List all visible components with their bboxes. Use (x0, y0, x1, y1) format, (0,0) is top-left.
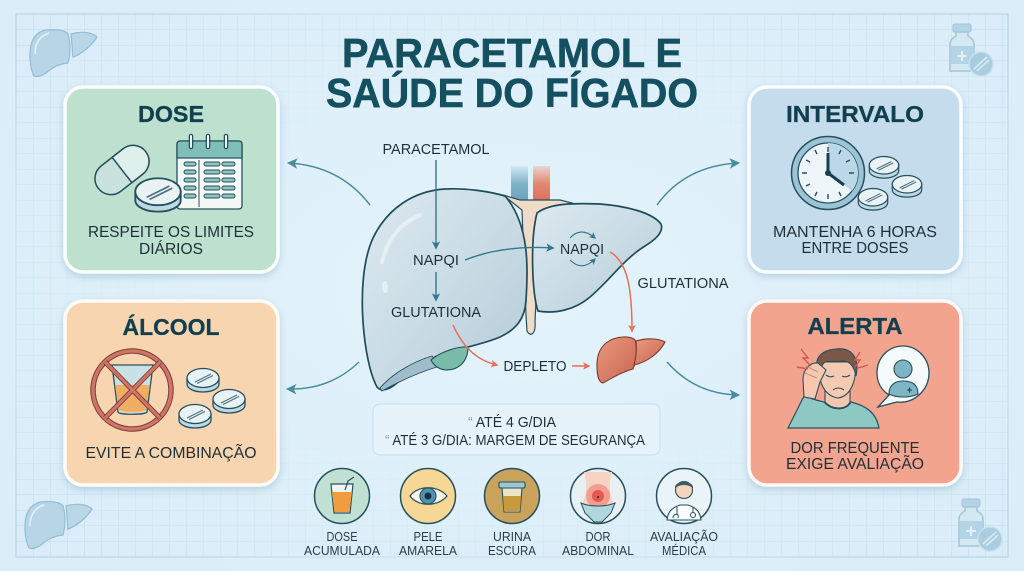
icon item: urina escura (484, 468, 540, 558)
text: dose (88, 224, 254, 258)
heading: interval: INTERVALO (786, 101, 924, 127)
text: alert (786, 440, 924, 473)
icon item: dose acumulada: DOSE (326, 529, 358, 544)
arrow: napqi to glutationa (435, 272, 437, 300)
panel: alcohol (65, 301, 278, 485)
text: interval: ENTRE DOSES (802, 240, 908, 257)
icon item: dor abdominal: DOR (586, 529, 610, 544)
icon item: pele amarela: AMARELA (399, 543, 457, 558)
icon: doctor speech bubble (877, 346, 929, 407)
arrow: to alcohol (288, 362, 359, 389)
arrow: to interval (657, 163, 738, 205)
title (326, 30, 698, 116)
icon: capsule (89, 139, 155, 201)
icon: corner medicine bottom right (959, 499, 1002, 551)
icon item: urina escura: URINA (493, 529, 531, 544)
vessels (511, 166, 550, 202)
arrow: to alert (667, 362, 738, 395)
callout: dose limits: “ ATÉ 4 G/DIA (468, 414, 556, 431)
panel: alert (749, 301, 961, 485)
label: glutationa: GLUTATIONA (391, 304, 481, 321)
icon: forbidden glass (93, 351, 171, 429)
left lobe (533, 204, 662, 312)
small damaged liver (597, 337, 665, 383)
heading: alert: ALERTA (808, 313, 903, 339)
lower lobe shading (380, 356, 440, 391)
text: alert: EXIGE AVALIAÇÃO (786, 453, 924, 473)
icon: clock (792, 136, 864, 210)
label: paracetamol: PARACETAMOL (382, 141, 490, 158)
text: dose: DIÁRIOS (139, 239, 203, 258)
label: glutationa right: GLUTATIONA (638, 275, 728, 292)
icon item: urina escura: ESCURA (488, 543, 536, 558)
icon item: avaliação médica: MÉDICA (662, 543, 706, 558)
icon item: avaliação médica (650, 468, 718, 558)
title: SAÚDE DO FÍGADO (326, 70, 698, 116)
arrow: red to depleto (453, 325, 497, 365)
liver illustration (362, 166, 662, 391)
icon: corner liver bottom left (25, 502, 92, 549)
arrow: napqi across lobes (465, 248, 553, 260)
icon item: dor abdominal: ABDOMINAL (562, 543, 634, 558)
icon: calendar (177, 136, 242, 209)
flow: paracetamol to napqi (382, 141, 490, 248)
icon item: pele amarela: PELE (414, 529, 443, 544)
panel: dose (65, 87, 278, 272)
cycle arrows (570, 232, 595, 266)
heading: dose: DOSE (138, 101, 204, 127)
text: interval: MANTENHA 6 HORAS (773, 224, 937, 241)
heading: alcohol: ÁLCOOL (122, 313, 220, 340)
callout: dose limits: “ ATÉ 3 G/DIA: MARGEM DE SEGURANÇA (385, 432, 645, 449)
icon: corner medicine top right (950, 24, 993, 76)
label: depleto: DEPLETO (504, 358, 566, 375)
icon: person with headache (788, 349, 879, 428)
arrow: red to small liver (610, 252, 632, 331)
arrow: depleto to liver (572, 365, 589, 367)
right lobe (362, 189, 527, 390)
icon: corner liver top left (30, 30, 97, 77)
panel: interval (749, 87, 961, 272)
text: dose: RESPEITE OS LIMITES (88, 224, 254, 241)
title: PARACETAMOL E (342, 30, 682, 76)
text: alert: DOR FREQUENTE (790, 440, 920, 457)
icon item: dose acumulada (304, 468, 380, 558)
label: napqi: NAPQI (413, 252, 459, 269)
label: napqi right: NAPQI (560, 241, 604, 258)
gallbladder (431, 347, 468, 370)
icon item: dose acumulada: ACUMULADA (304, 543, 380, 558)
icon: tablets (179, 368, 245, 428)
icon item: pele amarela (399, 468, 457, 558)
arrow: to dose (289, 163, 370, 205)
icon: tablet (135, 178, 181, 212)
callout: dose limits (373, 404, 660, 455)
icon item: dor abdominal (562, 468, 634, 558)
text: alcohol: EVITE A COMBINAÇÃO (86, 442, 256, 462)
falciform ligament (503, 195, 572, 334)
icon item: avaliação médica: AVALIAÇÃO (650, 529, 718, 544)
text: interval (773, 224, 937, 257)
icon: tablets (858, 156, 922, 210)
